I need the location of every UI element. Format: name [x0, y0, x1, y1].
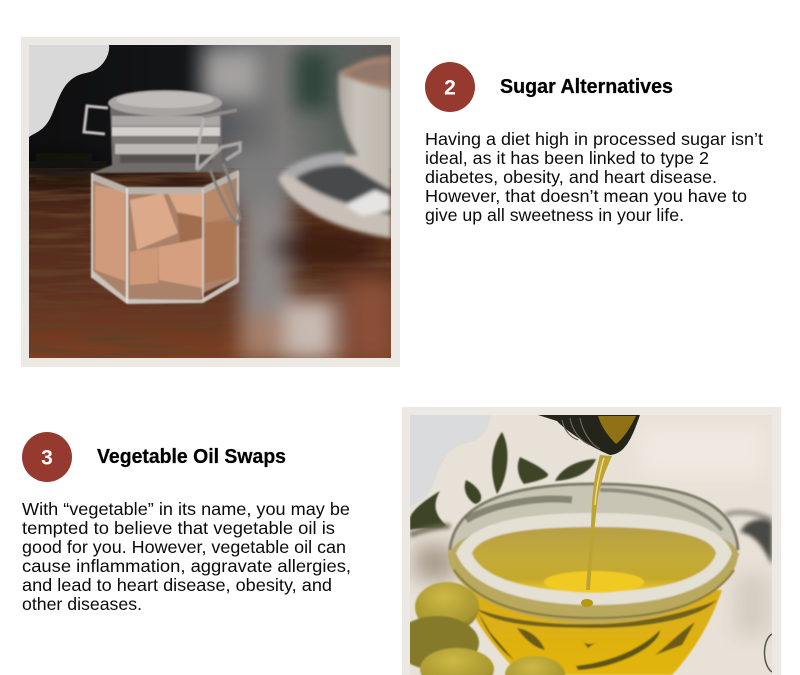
olive leaves — [410, 432, 596, 530]
blurred table tones — [415, 425, 770, 635]
reflections in oil — [576, 630, 660, 670]
text block: vegetable oil description: good for you. However, vegetable oil can — [22, 537, 346, 557]
jar — [84, 90, 240, 304]
bottle neck — [538, 415, 640, 455]
text block: sugar description: ideal, as it has been linked to type 2 — [425, 148, 709, 168]
heading: Sugar Alternatives: Sugar Alternatives — [500, 76, 673, 98]
section 3 number badge: 3 — [41, 446, 53, 470]
olives — [395, 582, 565, 675]
photo: olive oil poured into glass bowl — [395, 415, 772, 675]
text block: sugar description: diabetes, obesity, and heart disease. — [425, 167, 717, 187]
text block: vegetable oil description: With “vegetable” in its name, you may be — [22, 499, 350, 519]
decorative corner blob — [410, 415, 490, 507]
text block: sugar description: However, that doesn’t mean you have to — [425, 186, 747, 206]
oil stream — [586, 455, 612, 590]
decorative corner blob — [29, 45, 109, 137]
cup and saucer — [278, 56, 391, 238]
panel: sugar photo frame — [21, 37, 400, 367]
text block: sugar description: Having a diet high in processed sugar isn’t — [425, 129, 763, 149]
panel: olive oil photo frame — [395, 407, 781, 675]
photo: sugar jar on wooden table — [29, 45, 395, 360]
text block: sugar description: give up all sweetness in your life. — [425, 205, 684, 225]
section 3 number badge — [22, 432, 72, 482]
text block: vegetable oil description: cause inflammation, aggravate allergies, — [22, 556, 351, 576]
text block: sugar description — [425, 129, 763, 225]
section 2 number badge: 2 — [444, 76, 456, 100]
heading: Vegetable Oil Swaps: Vegetable Oil Swaps — [97, 446, 286, 468]
text block: vegetable oil description — [22, 499, 351, 614]
glass bowl — [448, 483, 738, 675]
section 2 number badge — [425, 62, 475, 112]
blurred background tones — [29, 50, 395, 360]
text block: vegetable oil description: and lead to heart disease, obesity, and — [22, 575, 332, 595]
text block: vegetable oil description: tempted to believe that vegetable oil is — [22, 518, 335, 538]
text block: vegetable oil description: other diseases. — [22, 594, 142, 614]
wire ornament — [764, 634, 772, 672]
sugar cubes — [95, 185, 235, 288]
clips — [84, 106, 108, 134]
